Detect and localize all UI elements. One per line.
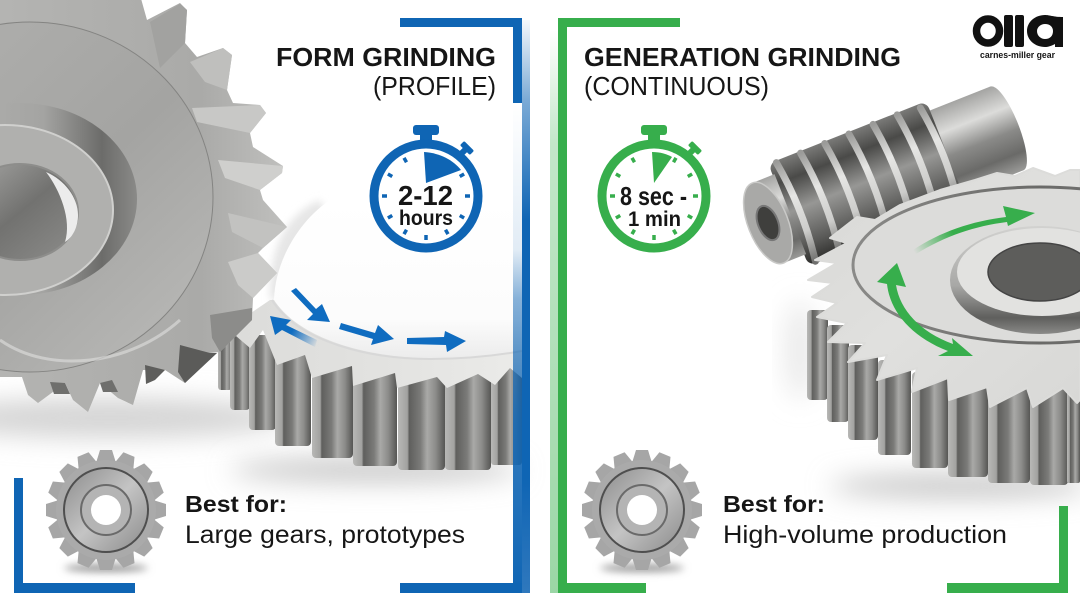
icon: small gear, generation grinding — [582, 450, 702, 572]
stopwatch: form grinding: hours — [399, 207, 453, 230]
hub flat — [957, 228, 1080, 316]
bore opening — [46, 172, 78, 242]
hub step — [950, 226, 1080, 334]
arrow 1 — [291, 288, 330, 322]
gear teeth — [807, 310, 1080, 485]
divider outer — [522, 20, 530, 593]
worm shaft — [729, 73, 1038, 282]
gear teeth — [218, 335, 522, 470]
bore — [0, 164, 78, 260]
recess edge — [272, 300, 522, 359]
right workpiece gear — [807, 168, 1080, 485]
inner recess — [274, 200, 522, 358]
light divider band — [550, 30, 558, 593]
logo — [976, 15, 1063, 60]
heading: generation grinding: (CONTINUOUS) — [584, 71, 769, 101]
left shaft — [752, 174, 806, 263]
face highlight — [0, 320, 180, 361]
heading: form grinding: (PROFILE) — [373, 71, 496, 101]
left bracket — [558, 18, 680, 593]
green frame — [550, 18, 1068, 593]
text: best for, form grinding: Large gears, prototypes — [185, 521, 465, 549]
text: best for, generation grinding: High-volume production — [723, 521, 1007, 549]
top bracket — [400, 18, 522, 103]
hub step — [0, 103, 137, 295]
hub flat — [0, 125, 113, 295]
gear outline — [0, 0, 287, 412]
heading: generation grinding: GENERATION GRINDING — [584, 42, 901, 72]
bottom bracket — [400, 583, 522, 593]
face disc — [0, 22, 213, 372]
face recess ring — [853, 187, 1080, 343]
motion arrows: form grinding — [270, 288, 466, 352]
left bore — [752, 203, 784, 243]
stopwatch: form grinding — [374, 125, 478, 248]
right shaft end — [919, 87, 1024, 199]
heading: form grinding: FORM GRINDING — [276, 42, 496, 72]
right end cap — [979, 82, 1035, 175]
upper arrow — [913, 206, 1035, 254]
motion arrows: generation grinding — [877, 206, 1035, 356]
heading: form grinding — [276, 42, 496, 101]
soft floor shadows — [0, 300, 1080, 498]
text: best for, form grinding — [185, 491, 465, 549]
lower divider inner — [513, 103, 522, 593]
bore — [988, 243, 1080, 301]
icon: small gear, form grinding — [46, 450, 166, 572]
arrow 4 — [270, 316, 317, 347]
text: best for, form grinding: Best for: — [185, 491, 287, 517]
stopwatch: form grinding: 2-12 — [398, 180, 453, 211]
stopwatch: generation grinding: 8 sec - — [620, 181, 687, 211]
lower right bracket — [947, 506, 1068, 593]
logo: carnes-miller gear — [980, 50, 1055, 60]
heading: generation grinding — [584, 42, 901, 101]
stopwatch: generation grinding: 1 min — [628, 208, 681, 231]
arrow 3 — [407, 331, 466, 352]
stopwatch: generation grinding — [602, 125, 706, 248]
threaded body — [768, 101, 967, 266]
text: best for, generation grinding — [723, 491, 1007, 549]
left end face — [734, 176, 802, 270]
tooth flanks — [50, 4, 287, 394]
thread ridges — [776, 105, 962, 261]
arrow 2 — [339, 323, 394, 345]
left workpiece gear — [218, 200, 522, 470]
gear top face — [808, 168, 1080, 407]
text: best for, generation grinding: Best for: — [723, 491, 825, 517]
lower left bracket — [14, 478, 135, 593]
gear top face — [236, 300, 522, 388]
gear rim shade — [268, 201, 324, 300]
large gear — [0, 0, 287, 412]
blue frame — [14, 18, 530, 593]
lower double arrow — [877, 263, 973, 356]
